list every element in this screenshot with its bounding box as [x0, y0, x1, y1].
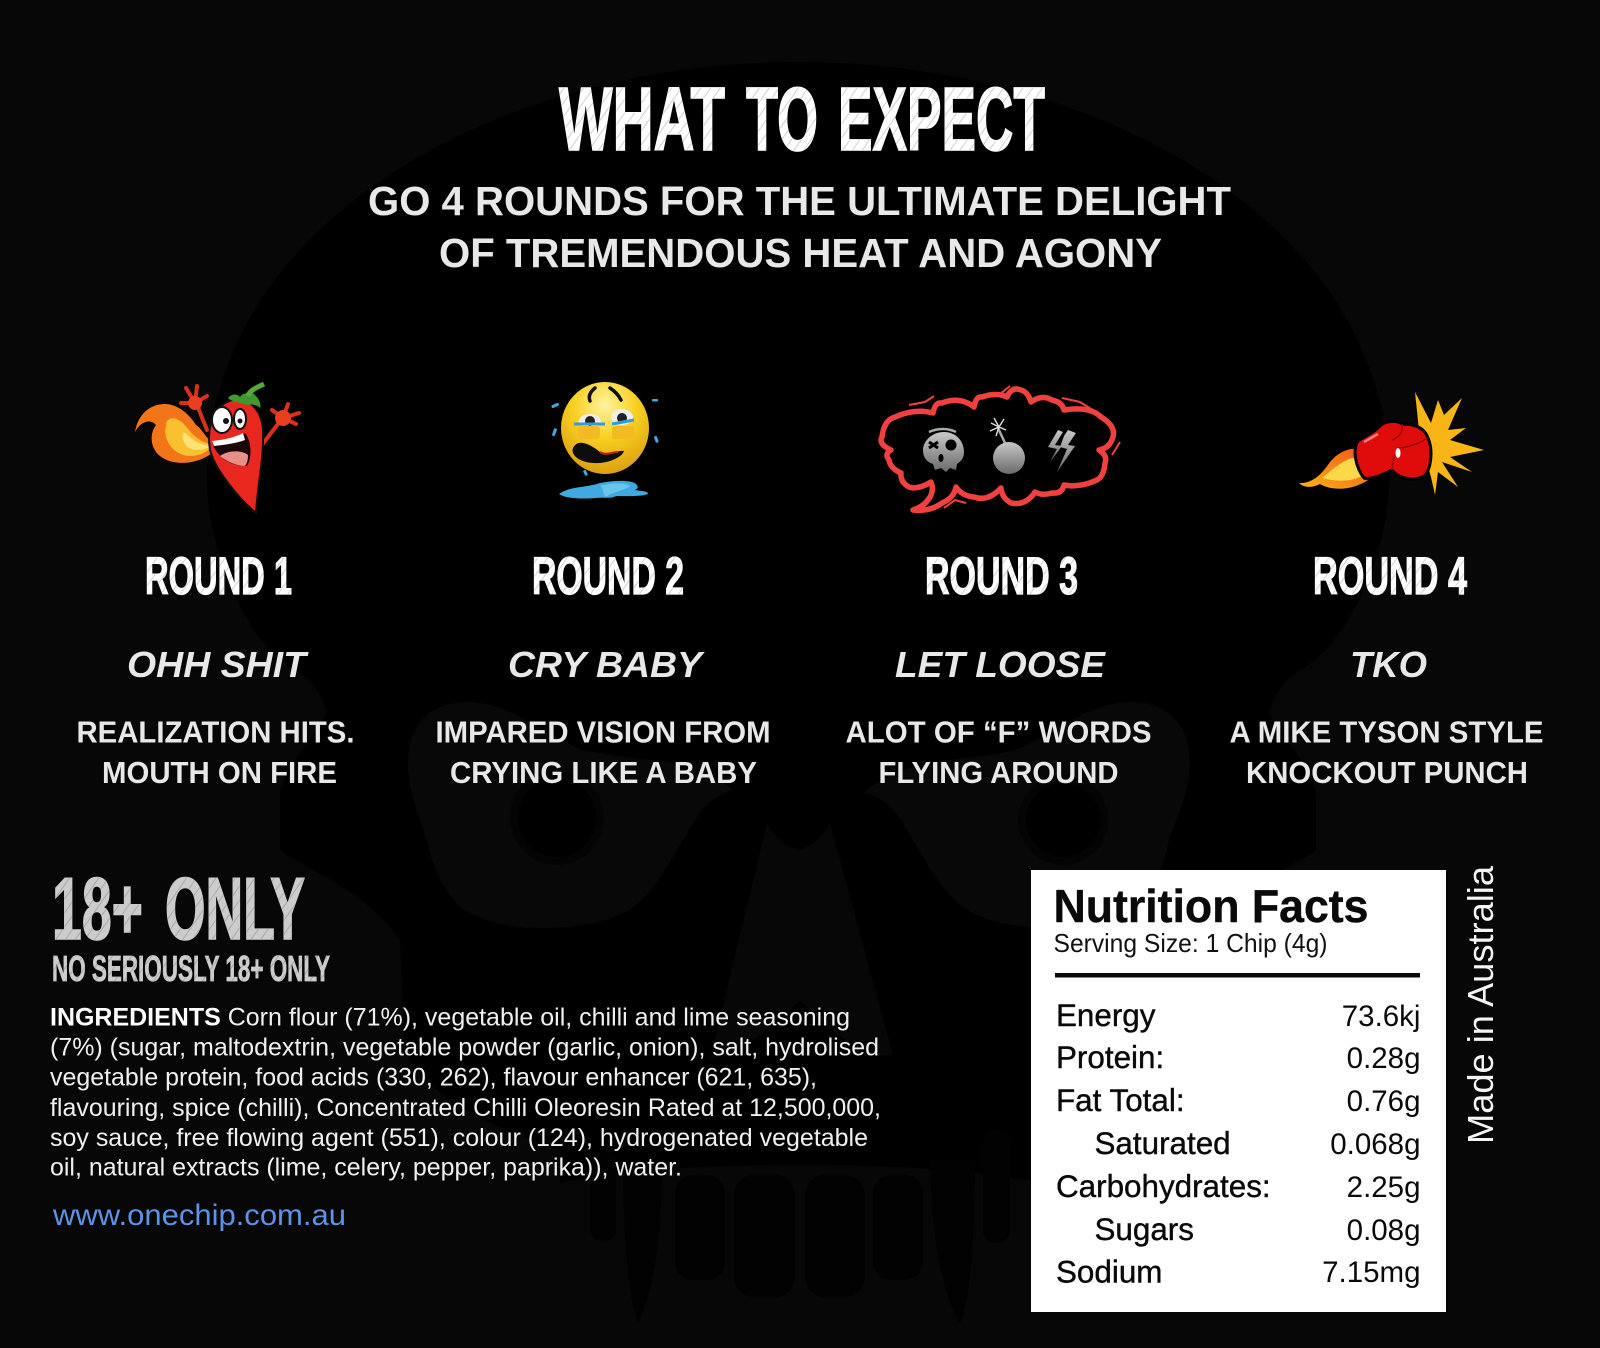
- round 4 description: A MIKE TYSON STYLE: [1230, 714, 1544, 750]
- ingredients text block: flavouring, spice (chilli), Concentrated Chilli Oleoresin Rated at 12,500,000,: [50, 1094, 881, 1122]
- nutrition rows: Energy: [1056, 998, 1156, 1033]
- round 2 description: [436, 714, 770, 790]
- round 3 name: LET LOOSE: [895, 644, 1106, 685]
- nutrition rows: 7.15mg: [1322, 1256, 1420, 1289]
- age warning heading: 18+: [52, 859, 143, 958]
- nutrition rows: Fat Total:: [1056, 1083, 1185, 1118]
- ingredients text block: [50, 1004, 881, 1182]
- nutrition rows: [1056, 998, 1420, 1290]
- nutrition rows: 0.068g: [1330, 1128, 1420, 1161]
- nutrition rows: 0.28g: [1347, 1042, 1420, 1075]
- icon: bomb: [990, 418, 1025, 474]
- round 3 description: ALOT OF “F” WORDS: [846, 714, 1152, 750]
- icon: swearing speech bubble: [881, 386, 1120, 510]
- ingredients text block: oil, natural extracts (lime, celery, pepper, paprika)), water.: [50, 1154, 682, 1182]
- icon: flaming boxing glove: [1299, 392, 1484, 495]
- round 4 heading: ROUND 4: [1313, 547, 1467, 606]
- nutrition rows: 2.25g: [1347, 1171, 1420, 1204]
- age warning subheading: NO SERIOUSLY 18+ ONLY: [52, 948, 330, 989]
- nutrition rows: Sodium: [1056, 1254, 1162, 1290]
- round 1 description: REALIZATION HITS.: [76, 714, 354, 750]
- round 4 name: TKO: [1350, 644, 1427, 685]
- icon: crying emoji: [551, 382, 659, 499]
- icon: lightning bolts: [1048, 430, 1076, 472]
- title: [559, 70, 1045, 170]
- round 3 description: FLYING AROUND: [878, 755, 1118, 790]
- age warning heading: [52, 859, 305, 958]
- website link: www.onechip.com.au: [52, 1199, 346, 1232]
- round 4 description: [1230, 714, 1544, 790]
- age warning heading: ONLY: [165, 859, 305, 958]
- subtitle: OF TREMENDOUS HEAT AND AGONY: [439, 230, 1162, 276]
- serving size: Serving Size: 1 Chip (4g): [1054, 928, 1328, 958]
- round 2 name: CRY BABY: [508, 644, 705, 685]
- round 1 name: OHH SHIT: [127, 644, 309, 685]
- ingredients text block: vegetable protein, food acids (330, 262), flavour enhancer (621, 635),: [50, 1064, 817, 1092]
- nutrition rows: Sugars: [1094, 1212, 1194, 1247]
- round 3 heading: ROUND 3: [925, 547, 1078, 606]
- round 1 heading: ROUND 1: [145, 547, 292, 606]
- nutrition rows: Saturated: [1094, 1126, 1231, 1161]
- panel: round 4: [1230, 392, 1544, 790]
- round 1 description: [76, 714, 354, 790]
- made in australia vertical label: Made in Australia: [1460, 865, 1501, 1144]
- nutrition rows: 0.08g: [1347, 1214, 1420, 1247]
- subtitle: GO 4 ROUNDS FOR THE ULTIMATE DELIGHT: [368, 178, 1231, 224]
- panel: nutrition facts: [1031, 870, 1446, 1312]
- round 1 description: MOUTH ON FIRE: [102, 755, 337, 790]
- ingredients text block: INGREDIENTS Corn flour (71%), vegetable oil, chilli and lime seasoning: [50, 1004, 850, 1032]
- round 2 heading: ROUND 2: [532, 547, 684, 606]
- nutrition rows: Protein:: [1056, 1040, 1164, 1075]
- round 3 description: [846, 714, 1152, 790]
- round 2 description: CRYING LIKE A BABY: [450, 755, 757, 790]
- ingredients text block: (7%) (sugar, maltodextrin, vegetable powder (garlic, onion), salt, hydrolised: [50, 1034, 879, 1062]
- nutrition heading: Nutrition Facts: [1054, 880, 1368, 932]
- panel: round 2: [436, 382, 770, 790]
- ingredients text block: soy sauce, free flowing agent (551), colour (124), hydrogenated vegetable: [50, 1124, 868, 1152]
- panel: round 1: [76, 384, 354, 790]
- round 2 description: IMPARED VISION FROM: [436, 714, 770, 750]
- icon: screaming chilli breathing fire: [135, 384, 299, 513]
- title: TO: [746, 70, 818, 170]
- nutrition rows: Carbohydrates:: [1056, 1169, 1271, 1204]
- panel: round 3: [846, 386, 1152, 790]
- background skull silhouette: [207, 62, 1389, 1348]
- title: WHAT: [559, 70, 725, 170]
- icon: skull: [923, 429, 964, 472]
- nutrition rows: 73.6kj: [1342, 1000, 1420, 1033]
- round 4 description: KNOCKOUT PUNCH: [1246, 755, 1528, 790]
- nutrition rows: 0.76g: [1347, 1085, 1420, 1118]
- title: EXPECT: [838, 70, 1045, 170]
- subtitle: [368, 178, 1231, 276]
